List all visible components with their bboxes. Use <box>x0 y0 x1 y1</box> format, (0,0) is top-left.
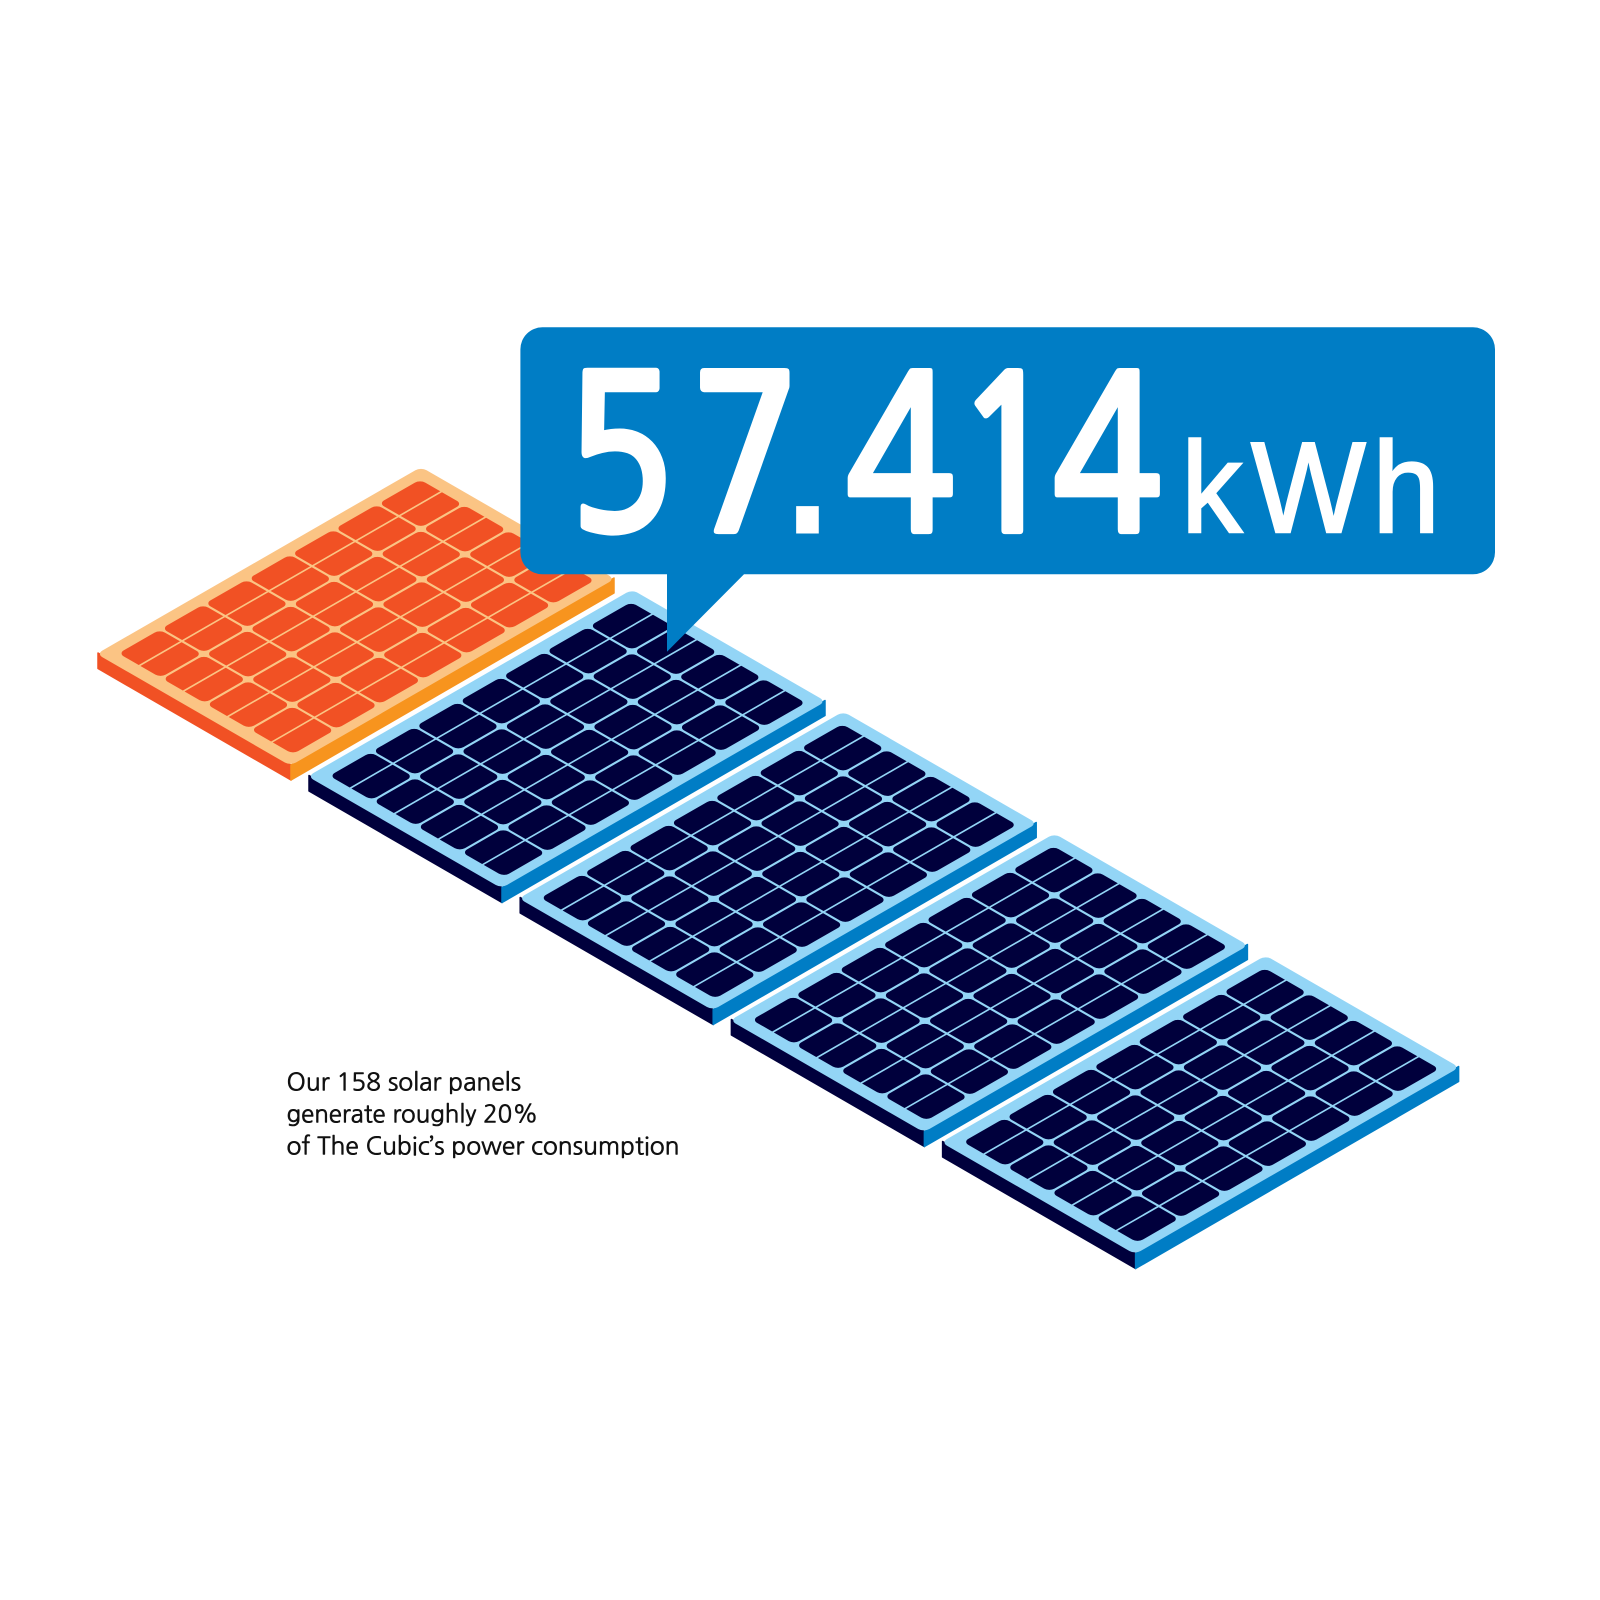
text block: caption: generate roughly 20% <box>286 1103 538 1127</box>
unit: kWh <box>1181 416 1440 560</box>
panel: blue solar panel 3 <box>730 834 1248 1146</box>
panel: orange highlighted solar panel <box>97 467 615 780</box>
text block: caption: Our 158 solar panels <box>286 1071 521 1095</box>
text block: caption: of The Cubic’s power consumption <box>286 1135 680 1159</box>
big number: 57.414 <box>563 352 1164 569</box>
panel: blue solar panel 1 <box>308 590 826 902</box>
text block: caption <box>286 1071 680 1159</box>
panel: blue solar panel 4 <box>941 956 1459 1268</box>
callout: speech bubble with total <box>520 327 1495 652</box>
panel: blue solar panel 2 <box>519 712 1037 1024</box>
